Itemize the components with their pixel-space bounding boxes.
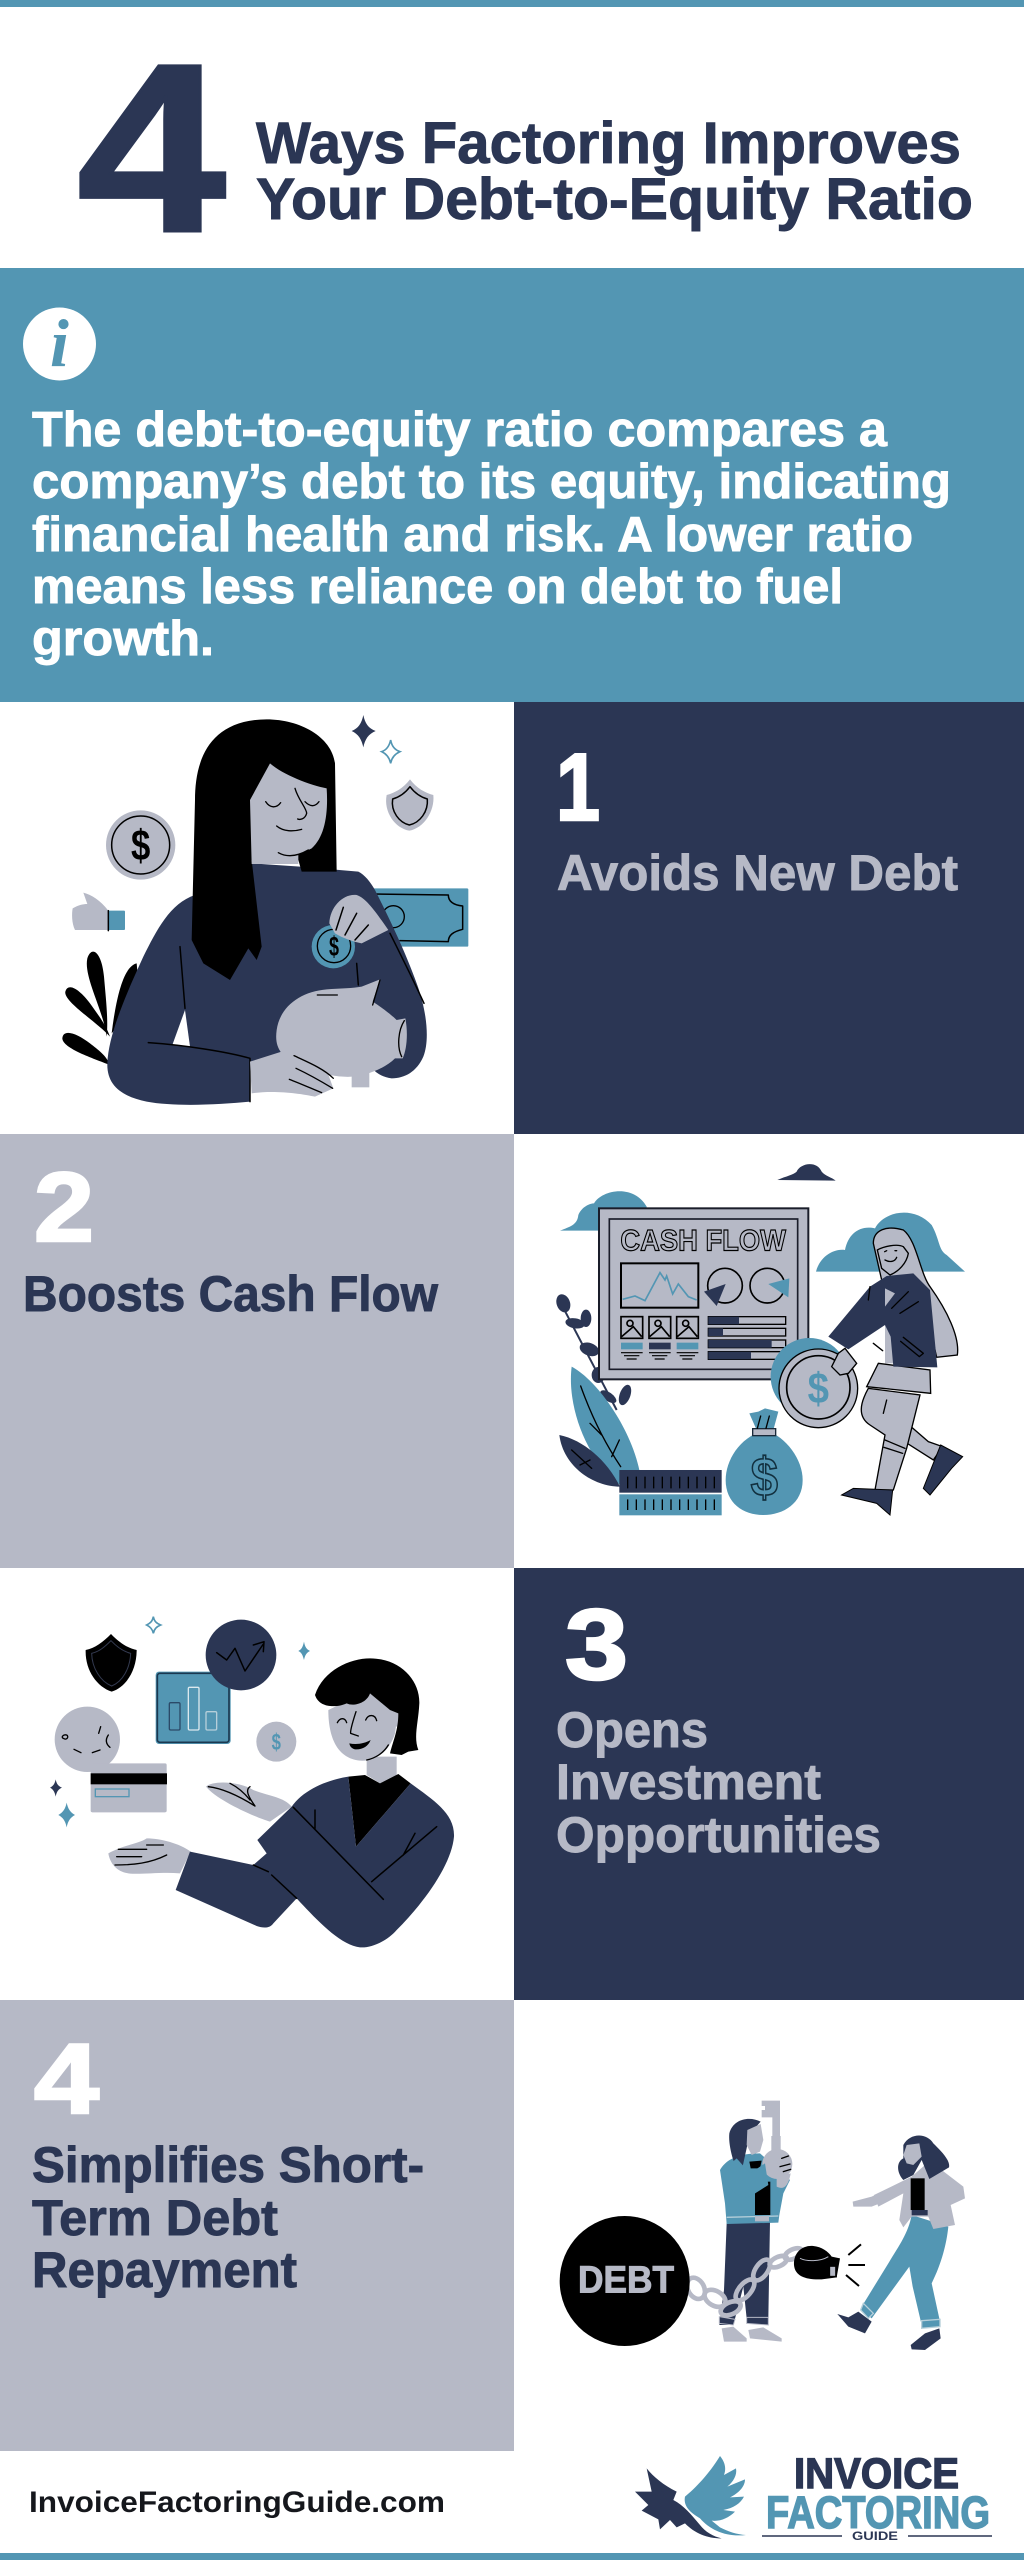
pie chart navy <box>704 1268 742 1306</box>
icon: open shackle <box>794 2246 840 2279</box>
heading: simplifies short-term debt repayment: Simplifies Short- <box>32 2137 424 2193</box>
illustration: woman saving in a piggy bank <box>62 715 468 1105</box>
front leg <box>861 1388 920 1490</box>
heading: simplifies short-term debt repayment <box>32 2137 424 2298</box>
icon: branch plant <box>554 1292 634 1410</box>
face <box>747 2124 763 2155</box>
shirt <box>755 2182 770 2215</box>
icon: outline sparkle <box>382 740 400 763</box>
panel: definition <box>0 268 1024 702</box>
heading: opens investment opportunities: Investment <box>556 1754 821 1810</box>
definition text: growth. <box>32 612 214 666</box>
icon: small cloud <box>777 1164 836 1181</box>
hair <box>729 2119 761 2170</box>
shoes <box>722 2327 782 2342</box>
arm gap <box>172 1010 190 1047</box>
jeans <box>861 2215 948 2325</box>
arm <box>722 2158 768 2197</box>
features <box>337 1712 377 1736</box>
icon: coin in hand: $ <box>329 931 339 962</box>
title line 1: Ways Factoring Improves <box>256 111 961 176</box>
icon: banknote <box>372 888 468 947</box>
sweater <box>176 1777 454 1947</box>
man <box>108 1658 454 1947</box>
progress bars <box>708 1317 786 1359</box>
logo bird <box>635 2456 746 2538</box>
collar <box>348 1774 411 1847</box>
icon: dollar coin: $ <box>131 822 150 870</box>
number 3: 3 <box>565 1589 628 1701</box>
logo <box>635 2450 992 2543</box>
heading: simplifies short-term debt repayment: Term Debt <box>32 2190 278 2246</box>
illustration: cash flow dashboard and woman with coin <box>554 1164 965 1515</box>
sleeve lines <box>148 933 424 1102</box>
icon: info <box>23 305 96 381</box>
icon: money bag: $ <box>751 1446 778 1508</box>
icon: stacked block <box>619 1470 722 1515</box>
back leg <box>897 1420 943 1460</box>
image tiles <box>621 1317 698 1338</box>
body sweater <box>107 863 427 1105</box>
logo word guide: GUIDE <box>852 2529 898 2543</box>
icon: navy sparkle <box>50 1779 62 1797</box>
icon: debt ball <box>560 2216 690 2346</box>
neck <box>367 1757 397 1783</box>
icon: grey face circle <box>55 1707 120 1772</box>
icon: money bag <box>726 1408 803 1515</box>
icon: large coin: $ <box>808 1365 829 1413</box>
icon: shield <box>386 779 433 831</box>
heading: opens investment opportunities: Opportunities <box>556 1807 881 1863</box>
line chart <box>621 1263 698 1308</box>
hair <box>315 1658 419 1755</box>
icon: teal leaves <box>559 1367 639 1487</box>
icon: dollar coin <box>106 810 175 880</box>
debt label: DEBT <box>578 2259 674 2301</box>
hand on coin <box>832 1348 857 1375</box>
jacket <box>720 2153 790 2224</box>
definition text: financial health and risk. A lower ratio <box>32 508 913 562</box>
heading: simplifies short-term debt repayment: Repayment <box>32 2242 297 2298</box>
skirt <box>867 1363 931 1393</box>
shoes <box>837 2312 872 2333</box>
top accent bar <box>0 0 1024 7</box>
icon: plant <box>62 952 140 1065</box>
definition text: means less reliance on debt to fuel <box>32 560 843 614</box>
icon: small dollar coin <box>256 1722 296 1762</box>
lower hand <box>250 1050 333 1097</box>
definition text: company’s debt to its equity, indicating <box>32 455 951 509</box>
shoes <box>842 1488 893 1515</box>
icon: info: i <box>50 305 69 381</box>
number 4: 4 <box>34 2023 99 2134</box>
icon: teal sparkle <box>298 1642 310 1660</box>
logo word invoice: INVOICE <box>794 2450 959 2498</box>
definition text <box>32 403 951 666</box>
illustration: breaking free from debt ball and chain <box>560 2101 965 2350</box>
footer website: InvoiceFactoringGuide.com <box>29 2486 445 2519</box>
title <box>77 14 973 282</box>
dashboard board <box>599 1208 808 1379</box>
hair <box>192 719 337 980</box>
upper hand <box>206 1783 292 1822</box>
icon: small dollar coin: $ <box>272 1729 281 1755</box>
hand <box>853 2195 878 2207</box>
icon: teal sparkle lower <box>58 1803 75 1827</box>
icon: thumbs up <box>72 893 125 931</box>
face <box>877 1245 908 1275</box>
icon: piggy bank <box>276 979 407 1087</box>
definition text: The debt-to-equity ratio compares a <box>32 403 888 457</box>
woman with coin <box>828 1228 963 1515</box>
bottom accent bar <box>0 2553 1024 2560</box>
man <box>719 2101 792 2342</box>
woman <box>837 2136 965 2350</box>
panel: item 4 <box>0 2000 514 2451</box>
icon: coin in hand <box>312 895 388 968</box>
face <box>328 1690 398 1761</box>
hair <box>898 2136 949 2180</box>
face <box>903 2143 922 2165</box>
sweater lines <box>253 1807 437 1899</box>
face <box>250 763 327 864</box>
top <box>911 2178 925 2210</box>
icon: cloud behind board <box>560 1191 647 1231</box>
panel: item 2 <box>0 1134 514 1568</box>
lower hand <box>108 1838 191 1874</box>
tile captions <box>621 1343 698 1359</box>
big numeral 4: 4 <box>77 14 226 282</box>
title line 2: Your Debt-to-Equity Ratio <box>256 167 973 232</box>
icon: large coin <box>771 1338 858 1428</box>
heading: opens investment opportunities <box>556 1702 881 1863</box>
number 2: 2 <box>34 1152 94 1262</box>
icon: trend circle <box>206 1620 276 1690</box>
heading: avoids new debt: Avoids New Debt <box>557 845 958 901</box>
jacket <box>874 2165 965 2229</box>
heading: opens investment opportunities: Opens <box>556 1702 708 1758</box>
key <box>762 2101 792 2179</box>
icon: bar chart tile <box>156 1672 231 1744</box>
panel: item 1 <box>514 702 1024 1134</box>
shirt <box>885 1287 898 1363</box>
burst lines <box>846 2244 865 2286</box>
illustration: man presenting financial icons <box>50 1617 454 1947</box>
pants <box>719 2222 770 2325</box>
jacket <box>828 1273 937 1367</box>
number 1: 1 <box>556 734 600 841</box>
icon: navy sparkle <box>352 715 376 747</box>
icon: credit card <box>91 1763 167 1812</box>
board heading: CASH FLOW <box>620 1225 787 1258</box>
pie chart teal <box>750 1268 789 1303</box>
icon: black shield <box>86 1634 137 1692</box>
hair <box>873 1228 958 1357</box>
chain <box>683 2246 804 2318</box>
icon: cloud behind woman <box>816 1213 965 1272</box>
heading: boosts cash flow: Boosts Cash Flow <box>23 1266 438 1322</box>
logo word factoring: FACTORING <box>766 2487 990 2538</box>
icon: outline sparkle <box>147 1617 161 1633</box>
panel: item 3 <box>514 1568 1024 2000</box>
